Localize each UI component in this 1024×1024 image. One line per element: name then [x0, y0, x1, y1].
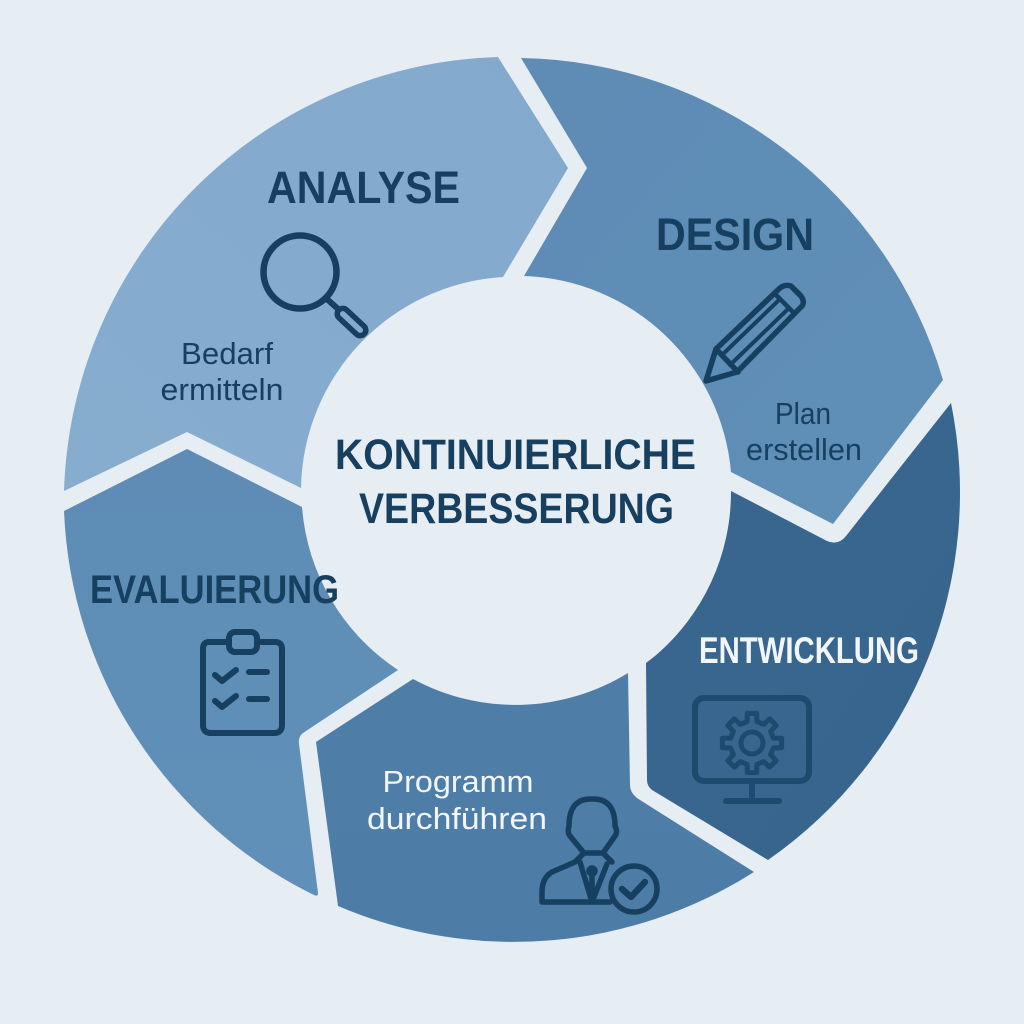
text: Plan erstellen	[746, 396, 862, 467]
center title: KONTINUIERLICHE	[335, 431, 696, 479]
icon: pencil	[706, 285, 803, 381]
segment shape: Programm	[316, 673, 754, 942]
panel: Evaluierung	[64, 449, 398, 896]
text: Bedarf ermitteln	[160, 336, 284, 407]
text: Programm durchfuehren	[367, 764, 547, 836]
icon: monitor with gear	[695, 698, 809, 801]
text: Programm durchfuehren: durchführen	[367, 801, 547, 836]
heading: Analyse: ANALYSE	[267, 162, 460, 213]
panel: Analyse	[64, 57, 568, 491]
segment shape: Design	[521, 58, 943, 524]
text: Plan erstellen: Plan	[775, 396, 831, 431]
icon: clipboard checklist	[203, 632, 282, 733]
text: Plan erstellen: erstellen	[746, 432, 862, 467]
segment shape: Evaluierung	[64, 449, 398, 896]
segment shape: Entwicklung	[646, 403, 960, 860]
icon: person with check badge	[542, 799, 657, 912]
segment shape: Analyse	[64, 57, 568, 491]
center title: VERBESSERUNG	[359, 485, 674, 533]
panel: Design	[521, 58, 943, 524]
center title	[335, 431, 696, 533]
heading: Entwicklung: ENTWICKLUNG	[699, 630, 919, 671]
text: Bedarf ermitteln: ermitteln	[160, 372, 284, 407]
heading: Design: DESIGN	[656, 209, 814, 260]
icon: magnifying glass	[264, 236, 368, 338]
text: Bedarf ermitteln: Bedarf	[181, 336, 273, 371]
heading: Evaluierung: EVALUIERUNG	[90, 568, 339, 612]
panel: Programm durchfuehren	[316, 673, 754, 942]
panel: Entwicklung	[646, 403, 960, 860]
text: Programm durchfuehren: Programm	[382, 764, 534, 799]
